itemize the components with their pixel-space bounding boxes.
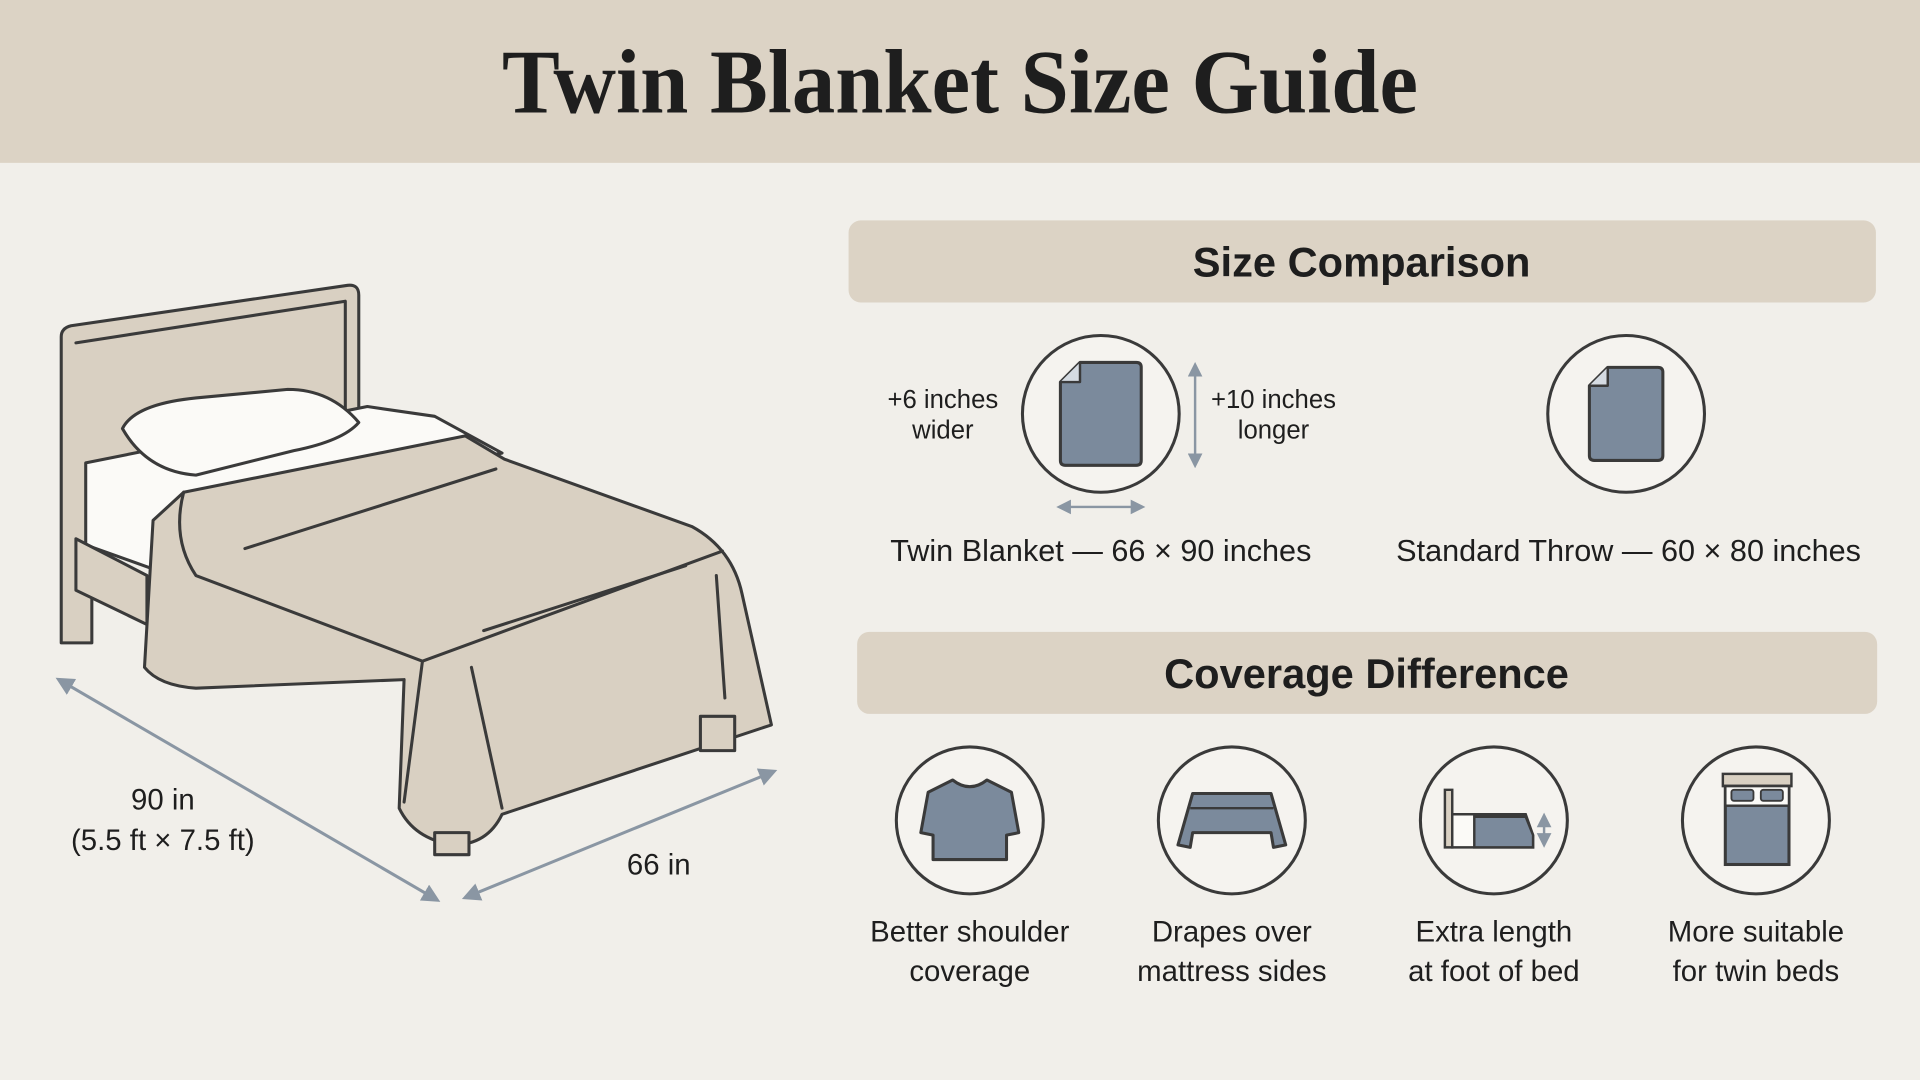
- dimension: 90 in: [59, 680, 437, 900]
- item: drapes over sides: mattress sides: [1137, 955, 1327, 988]
- pillow: [122, 389, 359, 475]
- item: drapes over sides: Drapes over: [1152, 916, 1312, 949]
- item: standard throw: Standard Throw — 60 × 80 inches: [1396, 534, 1861, 568]
- item: extra length: at foot of bed: [1408, 955, 1580, 988]
- title: Twin Blanket Size Guide: [502, 32, 1418, 133]
- dimension: 90 in: 90 in: [131, 783, 195, 816]
- item: twin blanket: longer: [1238, 416, 1310, 444]
- heading: size comparison: [849, 220, 1876, 302]
- panel: size comparison: [849, 220, 1876, 568]
- legs: [700, 716, 735, 751]
- dimension: 66 in: [465, 771, 774, 898]
- item: suitable for twin beds: for twin beds: [1673, 955, 1839, 988]
- blanket: [144, 436, 771, 845]
- item: drapes over sides: [1137, 747, 1327, 988]
- item: suitable for twin beds: [1668, 747, 1844, 988]
- item: twin blanket: +10 inches: [1211, 386, 1336, 414]
- heading: coverage difference: Coverage Difference: [1164, 650, 1569, 697]
- bed illustration: [61, 285, 771, 855]
- panel: coverage difference: [857, 632, 1877, 988]
- item: twin blanket: Twin Blanket — 66 × 90 inches: [890, 534, 1311, 568]
- item: shoulder coverage: Better shoulder: [870, 916, 1070, 949]
- item: twin blanket: +6 inches: [887, 386, 998, 414]
- item: twin blanket: wider: [911, 416, 974, 444]
- dimension: 66 in: 66 in: [627, 848, 691, 881]
- item: standard throw: [1396, 336, 1861, 568]
- item: shoulder coverage: [870, 747, 1070, 988]
- heading: coverage difference: [857, 632, 1877, 714]
- heading: size comparison: Size Comparison: [1193, 239, 1530, 286]
- mattress: [86, 407, 502, 576]
- dimension: 90 in: (5.5 ft × 7.5 ft): [71, 824, 255, 857]
- item: shoulder coverage: coverage: [909, 955, 1030, 988]
- headboard: [61, 285, 359, 643]
- item: suitable for twin beds: More suitable: [1668, 916, 1844, 949]
- item: extra length: [1408, 747, 1580, 988]
- header band: [0, 0, 1920, 163]
- item: twin blanket: [887, 336, 1336, 568]
- item: extra length: Extra length: [1415, 916, 1572, 949]
